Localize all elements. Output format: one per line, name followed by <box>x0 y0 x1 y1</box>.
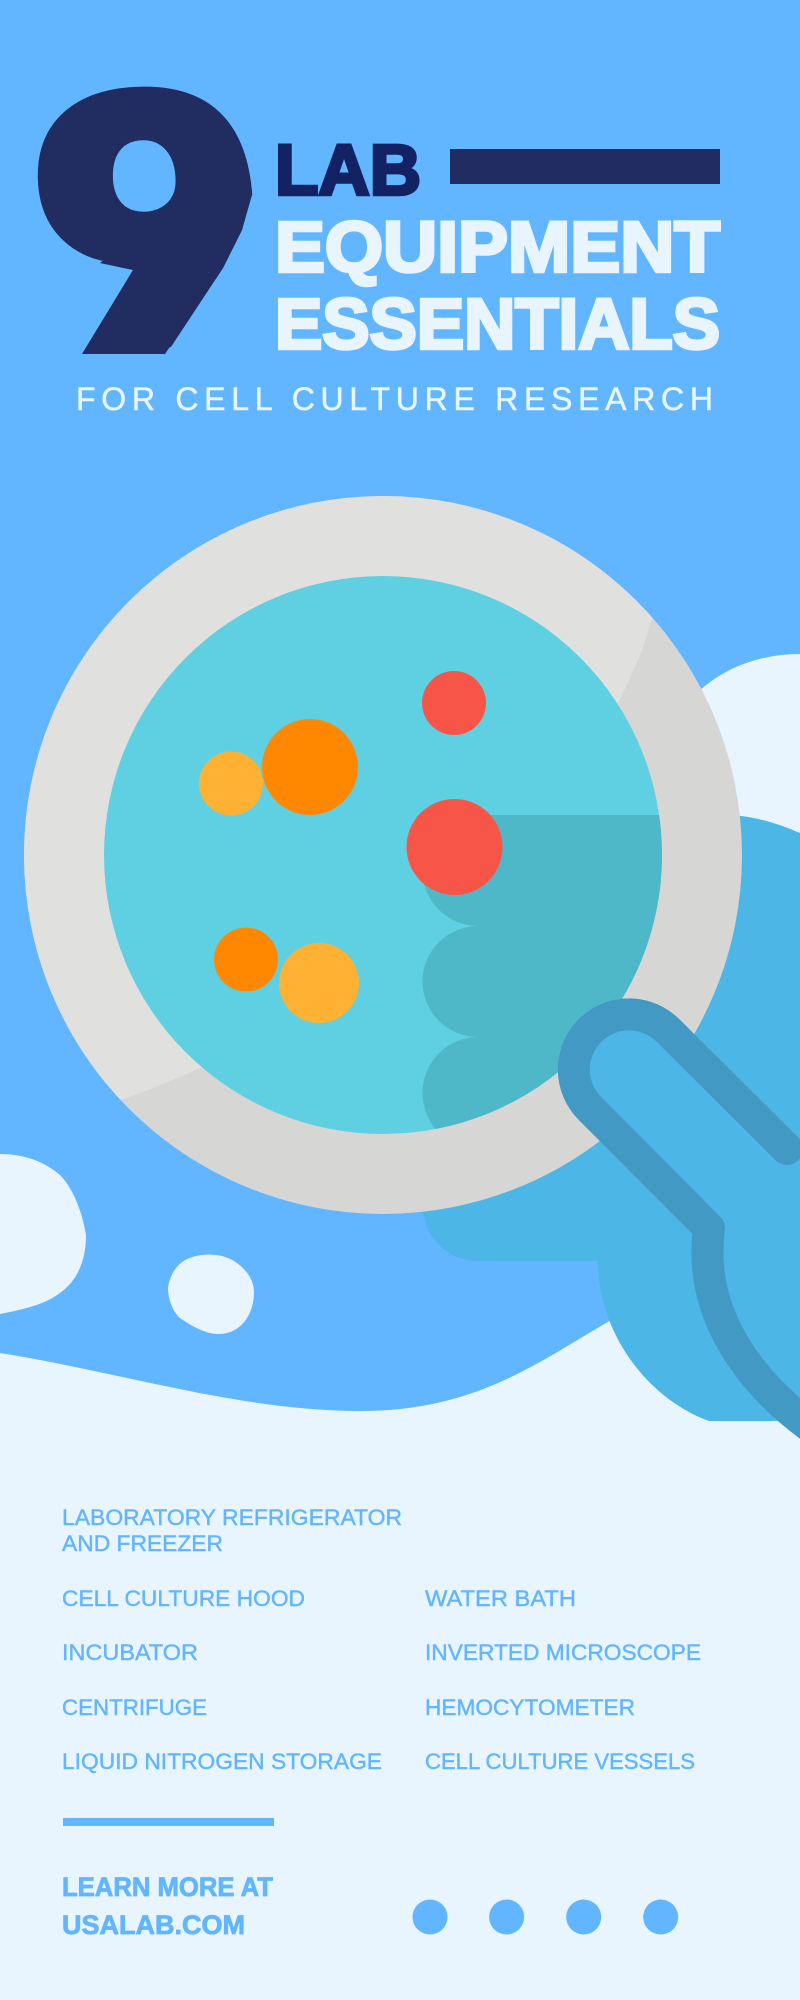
list item 6: WATER BATH <box>425 1586 576 1611</box>
magnifying glass <box>24 496 742 1214</box>
list item 9: CELL CULTURE VESSELS <box>425 1749 695 1774</box>
heading word: EQUIPMENT: EQUIPMENT <box>275 208 720 288</box>
list item 1: LABORATORY REFRIGERATOR <box>62 1505 402 1530</box>
thumb fill <box>574 1014 800 1440</box>
header: title block <box>0 23 720 417</box>
list item 7: INVERTED MICROSCOPE <box>425 1640 701 1665</box>
list item 2: CELL CULTURE HOOD <box>62 1586 305 1611</box>
cell: yellow large <box>279 943 359 1023</box>
call to action <box>62 1872 273 1940</box>
cell: orange large <box>262 719 358 815</box>
list item 8: HEMOCYTOMETER <box>425 1695 635 1720</box>
cloud: top right <box>690 654 800 900</box>
cloud: left blob <box>0 1154 86 1314</box>
heading bar <box>450 149 720 184</box>
cell: yellow small <box>199 752 263 816</box>
hand holding magnifier <box>422 815 800 1421</box>
equipment list <box>62 1505 701 1774</box>
heading word: ESSENTIALS: ESSENTIALS <box>275 286 720 364</box>
magnifier ring <box>24 496 742 1214</box>
call to action line 1: LEARN MORE AT <box>62 1872 273 1902</box>
heading word: LAB: LAB <box>275 132 421 210</box>
big numeral 9: 9 <box>33 23 259 414</box>
subtitle: FOR CELL CULTURE RESEARCH <box>76 381 713 417</box>
bottom light wave background <box>0 1250 800 2000</box>
cloud: small blob <box>168 1255 254 1334</box>
list item 3: INCUBATOR <box>62 1640 198 1665</box>
decorative dots <box>412 1900 678 1934</box>
divider bar <box>63 1818 274 1826</box>
thumb outline <box>574 1014 800 1440</box>
cell: orange small <box>214 928 278 992</box>
cell: red small <box>422 671 486 735</box>
list item 4: CENTRIFUGE <box>62 1695 207 1720</box>
hand seen through lens <box>422 815 662 1129</box>
list item 1 second line: AND FREEZER <box>62 1531 223 1556</box>
ring highlight <box>24 496 652 1100</box>
cell: red large <box>406 799 502 895</box>
lens <box>104 576 662 1134</box>
call to action line 2: USALAB.COM <box>62 1910 245 1940</box>
list item 5: LIQUID NITROGEN STORAGE <box>62 1749 382 1774</box>
